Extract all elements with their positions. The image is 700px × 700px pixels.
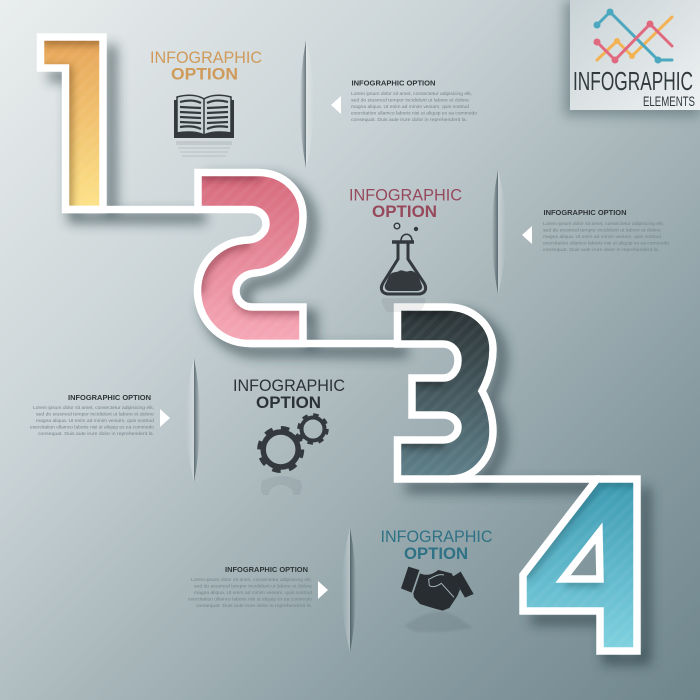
icon: gears (260, 415, 327, 470)
arrow: option 1 (331, 96, 341, 114)
connector 3 to 4 (450, 475, 600, 483)
text block: option 2: magna aliqua. Ut enim ad minim veniam, quis nostrud (543, 234, 661, 240)
heading: option 1: INFOGRAPHIC (150, 48, 262, 67)
arrow: option 4 (318, 581, 328, 599)
text block: option 4: Lorem ipsum dolor sit amet, consectetur adipisicing elit, (191, 577, 312, 583)
text block: option 1: Lorem ipsum dolor sit amet, consectetur adipisicing elit, (351, 91, 472, 97)
text block: option 2 (543, 210, 669, 253)
arrow: option 3 (160, 409, 170, 427)
heading: option 1: OPTION (171, 64, 238, 84)
line chart logo (594, 8, 672, 64)
text block: option 3: sed do eiusmod tempor incididunt ut labore et dolore (36, 412, 154, 418)
text block: option 1: INFOGRAPHIC OPTION (352, 80, 436, 88)
heading: option 2: OPTION (372, 202, 437, 221)
text block: option 4 (188, 567, 312, 609)
text block: option 2: exercitation ullamco laboris nisi ut aliquip ex ea commodo (543, 240, 669, 246)
number 1 (40, 37, 105, 212)
heading: option 3: OPTION (256, 393, 321, 412)
heading: option 1 (150, 48, 262, 84)
icon reflection: gears (261, 476, 302, 495)
divider: option 3 (186, 358, 200, 482)
heading: option 2: INFOGRAPHIC (349, 186, 462, 204)
icon: handshake (401, 567, 474, 611)
text block: option 2: INFOGRAPHIC OPTION (544, 210, 626, 217)
icon reflection: flask (382, 298, 425, 312)
heading: option 4 (380, 527, 492, 563)
text block: option 1: exercitation ullamco laboris nisi ut aliquip ex ea commodo (351, 110, 477, 116)
divider: option 4 (342, 528, 356, 652)
connector 1 to 2 (66, 206, 198, 213)
number 2 (198, 172, 305, 344)
heading: option 2 (349, 186, 462, 221)
icon: book (174, 95, 234, 138)
heading: option 4: INFOGRAPHIC (380, 527, 492, 546)
text block: option 2: Lorem ipsum dolor sit amet, consectetur adipisicing elit, (543, 221, 664, 227)
text block: option 4: consequat. Duis aute irure dolor in reprehenderit la. (196, 603, 312, 609)
connector 2 to 3 (250, 340, 400, 347)
text block: option 3: exercitation ullamco laboris nisi ut aliquip ex ea commodo (30, 424, 154, 430)
divider: option 2 (492, 170, 506, 294)
icon reflection: book (176, 141, 232, 156)
text block: option 4: magna aliqua. Ut enim ad minim veniam, quis nostrud (194, 590, 312, 596)
number 3 (398, 307, 493, 479)
text block: option 4: INFOGRAPHIC OPTION (225, 567, 308, 574)
text block: option 1: sed do eiusmod tempor incididunt ut labore et dolore (351, 98, 469, 104)
panel: header card (564, 0, 700, 116)
number frame shadows (48, 45, 645, 659)
text block: option 4: sed do eiusmod tempor incididunt ut labore et dolore (194, 584, 312, 590)
text block: option 1 (351, 80, 477, 123)
text block: option 2: consequat. Duis aute irure dolor in reprehenderit la. (543, 247, 659, 253)
heading: option 3: INFOGRAPHIC (233, 376, 345, 395)
text block: option 4: exercitation ullamco laboris nisi ut aliquip ex ea commodo (188, 596, 312, 602)
text block: option 2: sed do eiusmod tempor incididunt ut labore et dolore (543, 228, 661, 234)
text block: option 3: Lorem ipsum dolor sit amet, consectetur adipisicing elit, (33, 405, 154, 411)
text block: option 1: magna aliqua. Ut enim ad minim veniam, quis nostrud (351, 104, 469, 110)
text block: option 3 (30, 395, 154, 437)
number 4 (523, 479, 639, 651)
icon: flask (381, 223, 426, 294)
text block: option 3: magna aliqua. Ut enim ad minim veniam, quis nostrud (36, 418, 154, 424)
text block: option 3: INFOGRAPHIC OPTION (68, 395, 151, 402)
divider: option 1 (300, 40, 314, 168)
arrow: option 2 (522, 226, 532, 244)
text block: option 3: consequat. Duis aute irure dolor in reprehenderit la. (38, 431, 154, 437)
heading: option 3 (233, 376, 345, 412)
heading: option 4: OPTION (404, 544, 468, 563)
icon reflection: handshake (404, 612, 473, 632)
text block: option 1: consequat. Duis aute irure dolor in reprehenderit la. (351, 117, 467, 123)
